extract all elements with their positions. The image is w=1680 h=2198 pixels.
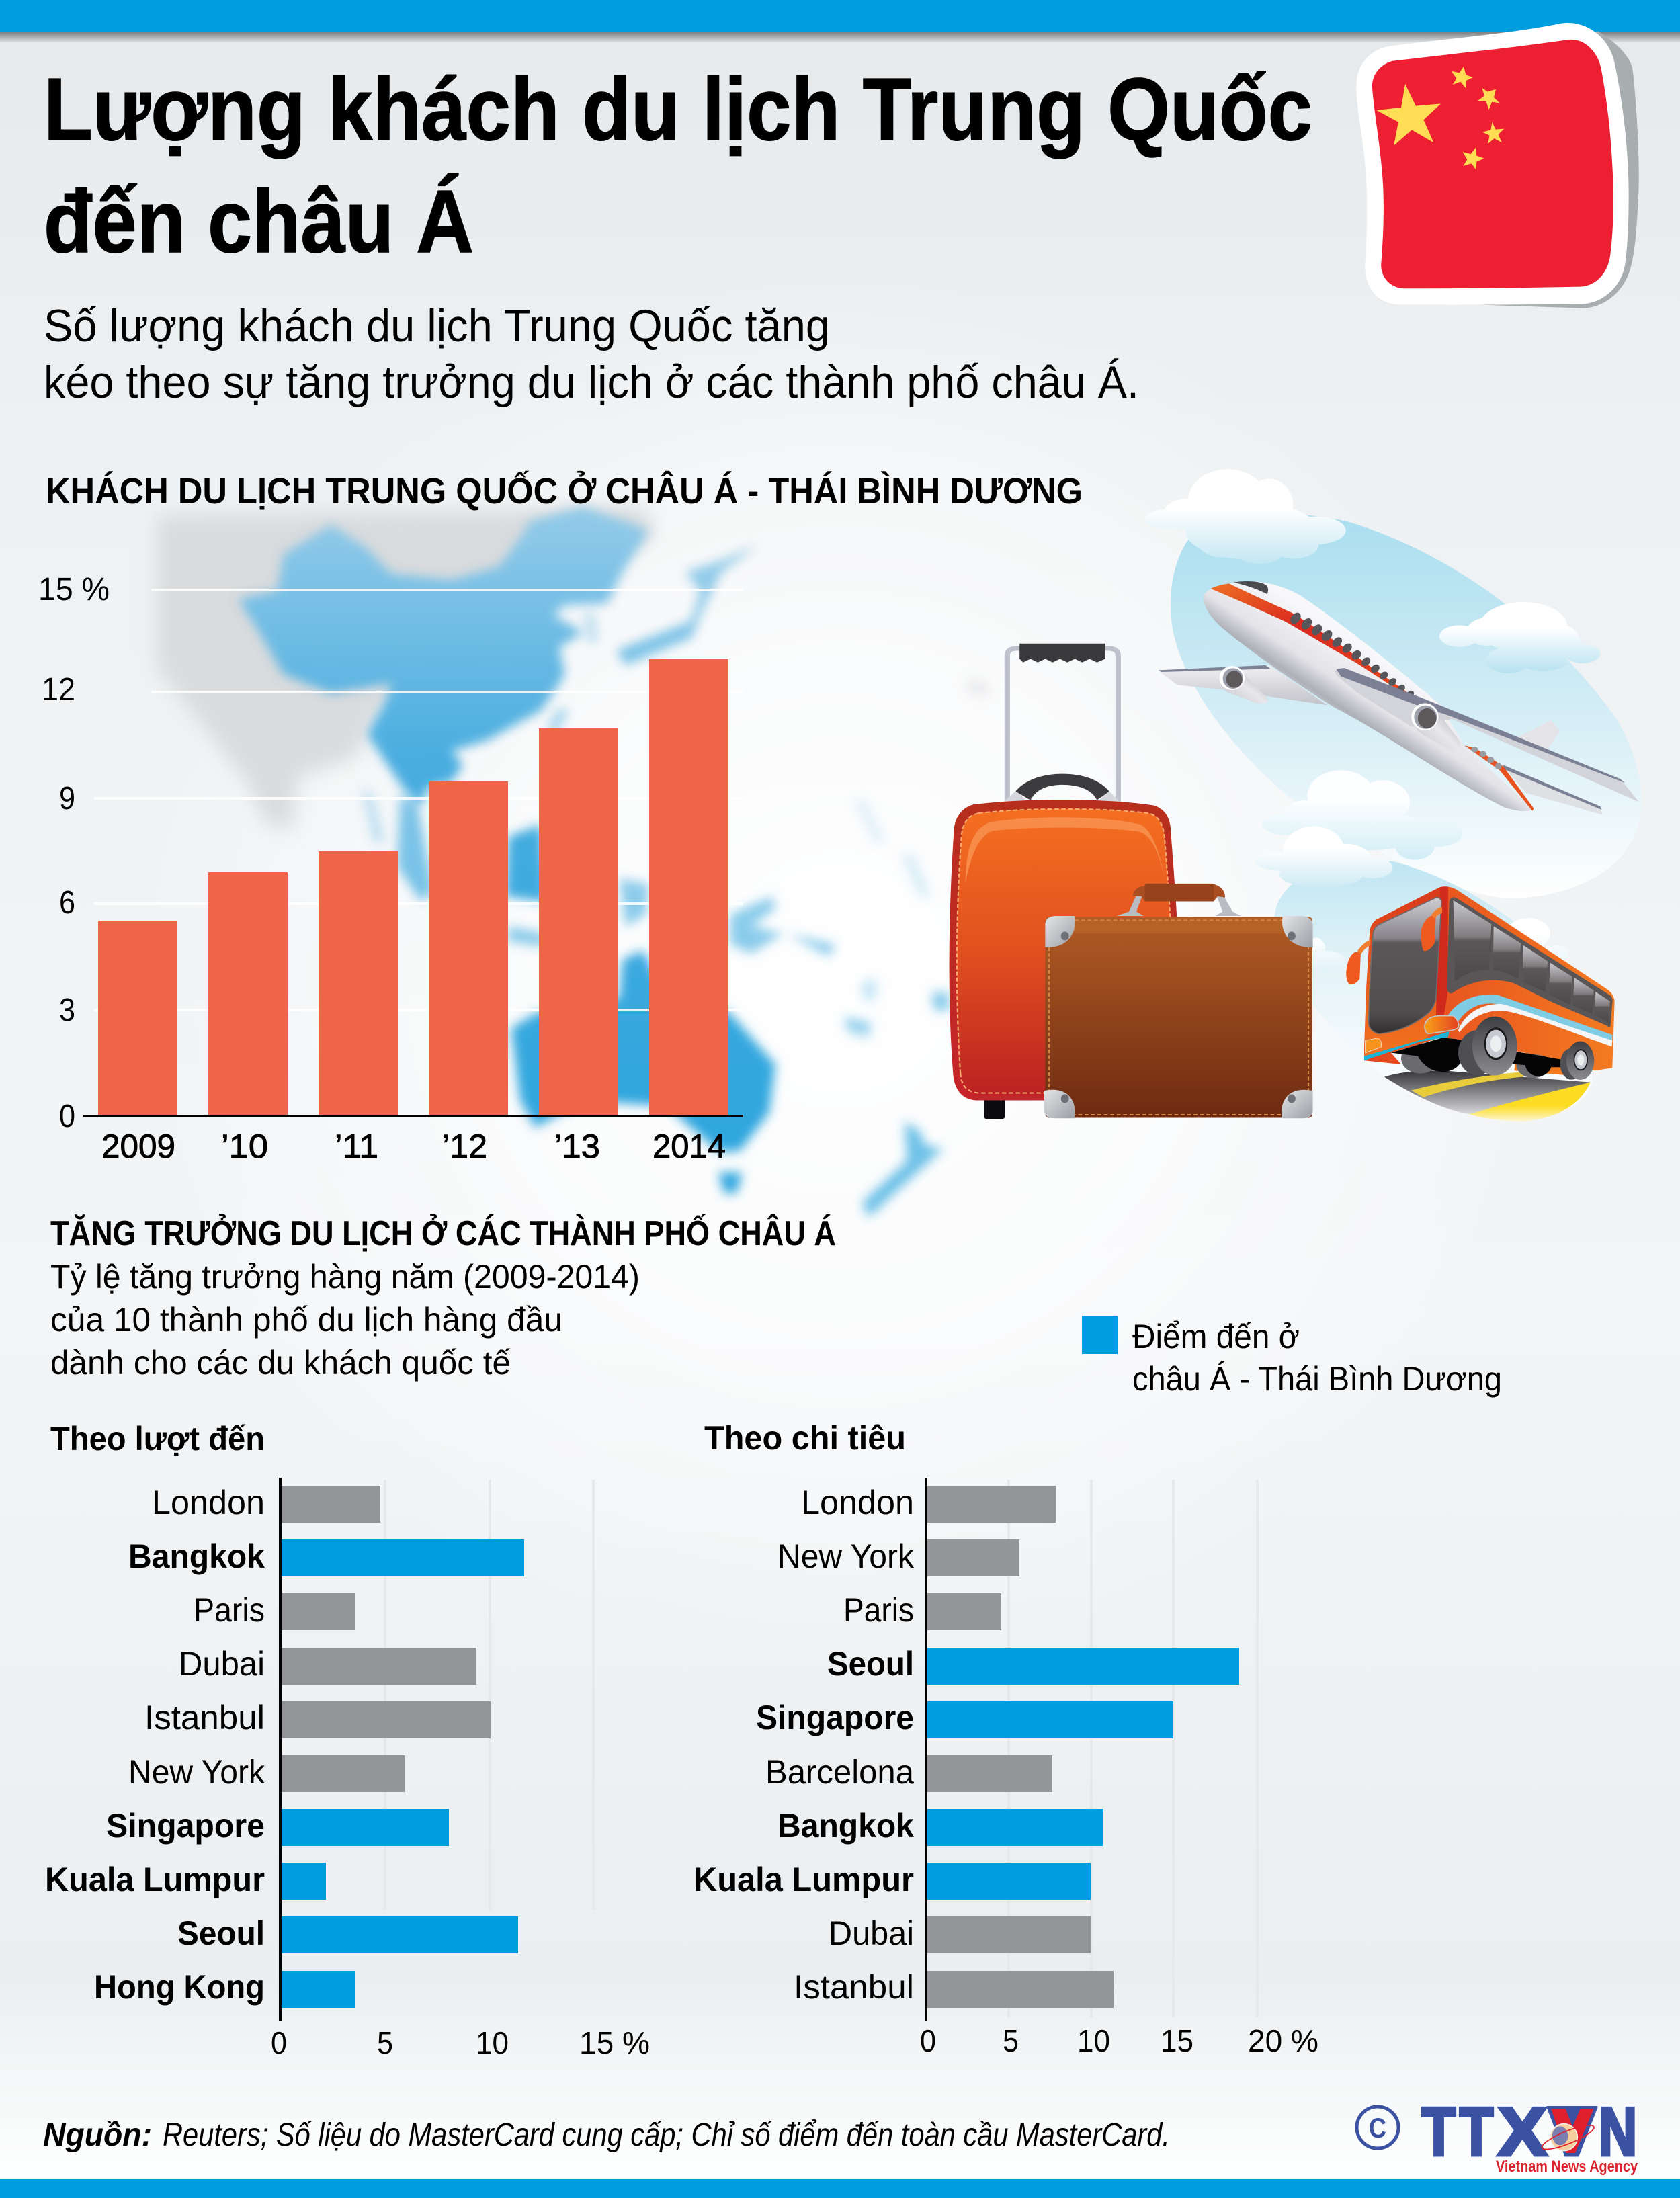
y axis labels: 3 bbox=[59, 992, 75, 1028]
bar 2009 bbox=[98, 921, 177, 1115]
bar chart: by arrivals bbox=[45, 1420, 650, 2060]
city labels: Hong Kong bbox=[94, 1968, 265, 2006]
source note: Nguồn: bbox=[43, 2117, 152, 2153]
legend: Asia-Pacific destination bbox=[1082, 1316, 1502, 1398]
city labels: Istanbul bbox=[144, 1699, 265, 1736]
case body bbox=[950, 800, 1183, 1101]
source note: Reuters; Số liệu do MasterCard cung cấp; Chỉ số điểm đến toàn cầu MasterCard. bbox=[163, 2117, 1170, 2153]
chart heading: Theo chi tiêu bbox=[704, 1419, 906, 1457]
axis labels: 10 bbox=[1077, 2023, 1110, 2058]
city labels: London bbox=[801, 1484, 914, 1521]
description text: của 10 thành phố du lịch hàng đầu bbox=[50, 1301, 562, 1339]
city labels: New York bbox=[128, 1753, 265, 1791]
city labels: Dubai bbox=[179, 1645, 265, 1683]
cloud right bbox=[1439, 602, 1600, 673]
sky shape behind bus bbox=[1274, 861, 1592, 1121]
cloud middle bbox=[1262, 770, 1463, 860]
rear wheel bbox=[1560, 1048, 1583, 1080]
y axis labels: 9 bbox=[59, 781, 75, 816]
side window panes bbox=[1454, 900, 1610, 1023]
title bbox=[44, 60, 1312, 271]
far engine bbox=[1220, 669, 1268, 704]
windows bbox=[1288, 611, 1502, 769]
axis labels bbox=[920, 2023, 1318, 2058]
description text: Tỷ lệ tăng trưởng hàng năm (2009-2014) bbox=[50, 1258, 640, 1296]
icon: rolling suitcase bbox=[950, 644, 1183, 1119]
front pillar bbox=[1436, 886, 1448, 1019]
city labels: New York bbox=[778, 1537, 915, 1575]
red cheatline bbox=[1211, 583, 1413, 697]
top blue band with shadow bbox=[0, 0, 1680, 42]
white stripe bbox=[1458, 1004, 1612, 1046]
handle supports bbox=[1117, 890, 1144, 916]
subtitle bbox=[44, 300, 1139, 408]
icon: brown briefcase bbox=[1044, 884, 1313, 1118]
city labels: Barcelona bbox=[765, 1753, 914, 1791]
axis labels: 15 bbox=[1161, 2023, 1193, 2058]
x axis labels: 2014 bbox=[653, 1128, 726, 1165]
wheel bbox=[984, 1097, 1005, 1119]
subtitle: kéo theo sự tăng trưởng du lịch ở các thành phố châu Á. bbox=[44, 357, 1139, 408]
heading: tourism growth in Asian cities: TĂNG TRƯỞNG DU LỊCH Ở CÁC THÀNH PHỐ CHÂU Á bbox=[50, 1214, 836, 1253]
x axis labels bbox=[101, 1128, 726, 1165]
wordmark: X bbox=[1498, 2095, 1547, 2170]
bar 2010 bbox=[208, 872, 288, 1115]
trolley handle bbox=[1007, 648, 1118, 802]
subtitle: Số lượng khách du lịch Trung Quốc tăng bbox=[44, 300, 830, 351]
city labels: Kuala Lumpur bbox=[694, 1861, 914, 1898]
title: đến châu Á bbox=[44, 172, 474, 271]
x axis labels: 2009 bbox=[101, 1128, 175, 1165]
city labels: Seoul bbox=[177, 1914, 265, 1952]
city labels: Paris bbox=[843, 1591, 914, 1629]
axis labels: 0 bbox=[920, 2023, 936, 2058]
axis labels: 15 % bbox=[579, 2025, 650, 2060]
bar 2012 bbox=[429, 781, 508, 1115]
fuselage bbox=[1204, 581, 1534, 811]
bottom trim bbox=[1364, 1031, 1450, 1060]
x axis labels: ’13 bbox=[554, 1128, 600, 1165]
road bbox=[1384, 1070, 1591, 1121]
axis labels: 10 bbox=[476, 2025, 509, 2060]
wordmark: T bbox=[1460, 2095, 1493, 2170]
tail stripe bbox=[1464, 745, 1534, 811]
icon: China flag sticker bbox=[1356, 23, 1639, 308]
far stabilizer bbox=[1503, 766, 1603, 815]
blurred map of Asia-Pacific bbox=[157, 507, 991, 1218]
cloud top bbox=[1144, 469, 1346, 564]
y axis labels: 12 bbox=[42, 672, 75, 708]
blue stripe bbox=[1447, 995, 1612, 1042]
windshield bbox=[1369, 898, 1441, 1033]
illustration: travel scene bbox=[950, 469, 1642, 1121]
far wing bbox=[1159, 666, 1327, 705]
y axis labels bbox=[38, 572, 110, 1134]
far wheels and underbody bbox=[1401, 1043, 1439, 1074]
wordmark: T bbox=[1422, 2095, 1456, 2170]
body bbox=[1364, 886, 1615, 1070]
title: Lượng khách du lịch Trung Quốc bbox=[44, 60, 1312, 159]
legend text: châu Á - Thái Bình Dương bbox=[1132, 1360, 1502, 1398]
axis labels: 5 bbox=[1003, 2023, 1019, 2058]
bar 2014 bbox=[649, 659, 728, 1115]
city labels: Kuala Lumpur bbox=[45, 1861, 265, 1898]
city labels bbox=[694, 1484, 915, 2006]
city labels: Seoul bbox=[827, 1645, 914, 1683]
chart heading: Theo lượt đến bbox=[50, 1420, 265, 1457]
bar 2011 bbox=[319, 851, 398, 1115]
x axis labels: ’10 bbox=[221, 1128, 268, 1165]
icon: airplane bbox=[1159, 581, 1639, 815]
bars bbox=[927, 1486, 1239, 2008]
headlights bbox=[1425, 1016, 1459, 1033]
city labels: London bbox=[152, 1484, 265, 1521]
cockpit window bbox=[1234, 581, 1268, 594]
legend swatch bbox=[1082, 1316, 1118, 1354]
corners bbox=[1045, 916, 1075, 947]
description text bbox=[50, 1258, 640, 1382]
column chart: Chinese tourists 2009-2014 bbox=[38, 572, 743, 1165]
logo: TTXVN bbox=[1357, 2095, 1638, 2176]
city labels: Istanbul bbox=[794, 1968, 914, 2006]
y axis labels: 6 bbox=[59, 885, 75, 921]
side window frame bbox=[1447, 897, 1613, 1027]
agency name: Vietnam News Agency bbox=[1496, 2158, 1638, 2176]
near engine bbox=[1413, 705, 1460, 751]
y axis labels: 0 bbox=[59, 1099, 75, 1134]
mirrors bbox=[1346, 952, 1361, 984]
legend text bbox=[1132, 1318, 1502, 1398]
city labels: Dubai bbox=[829, 1914, 914, 1952]
bar chart: by spending bbox=[694, 1419, 1318, 2058]
front wheel bbox=[1458, 1030, 1497, 1075]
clouds behind bus bbox=[1306, 918, 1568, 973]
city labels: Singapore bbox=[756, 1699, 914, 1736]
axis labels: 20 % bbox=[1248, 2023, 1318, 2058]
heading: Chinese tourists in Asia-Pacific: KHÁCH DU LỊCH TRUNG QUỐC Ở CHÂU Á - THÁI BÌNH DƯƠNG bbox=[46, 470, 1083, 511]
tail fin bbox=[1517, 720, 1560, 749]
axis labels: 0 bbox=[271, 2025, 287, 2060]
x axis labels: ’12 bbox=[442, 1128, 487, 1165]
copyright mark: C bbox=[1369, 2112, 1386, 2144]
cloud lower bbox=[1255, 827, 1392, 888]
emblem: red V and globe bbox=[1540, 2106, 1597, 2156]
wordmark: N bbox=[1599, 2095, 1637, 2170]
case bbox=[1045, 917, 1312, 1118]
city labels: Bangkok bbox=[778, 1807, 914, 1845]
handle bbox=[1133, 884, 1225, 902]
bars bbox=[282, 1486, 524, 2008]
city labels: Paris bbox=[194, 1591, 265, 1629]
y axis labels: 15 % bbox=[38, 572, 110, 607]
axis labels bbox=[271, 2025, 650, 2060]
bottom blue band bbox=[0, 2179, 1680, 2198]
near wing bbox=[1335, 668, 1639, 802]
city labels bbox=[45, 1484, 265, 2006]
copyright mark bbox=[1357, 2107, 1398, 2148]
x axis labels: ’11 bbox=[335, 1128, 378, 1165]
top handle bbox=[1003, 790, 1025, 802]
bar 2013 bbox=[539, 728, 618, 1115]
city labels: Bangkok bbox=[128, 1537, 265, 1575]
sky shape behind plane bbox=[1171, 514, 1642, 898]
icon: bus on road bbox=[1346, 886, 1615, 1121]
axis labels: 5 bbox=[377, 2025, 393, 2060]
description text: dành cho các du khách quốc tế bbox=[50, 1344, 511, 1382]
city labels: Singapore bbox=[106, 1807, 265, 1845]
wordmark: V bbox=[1548, 2095, 1596, 2170]
legend text: Điểm đến ở bbox=[1132, 1318, 1300, 1355]
